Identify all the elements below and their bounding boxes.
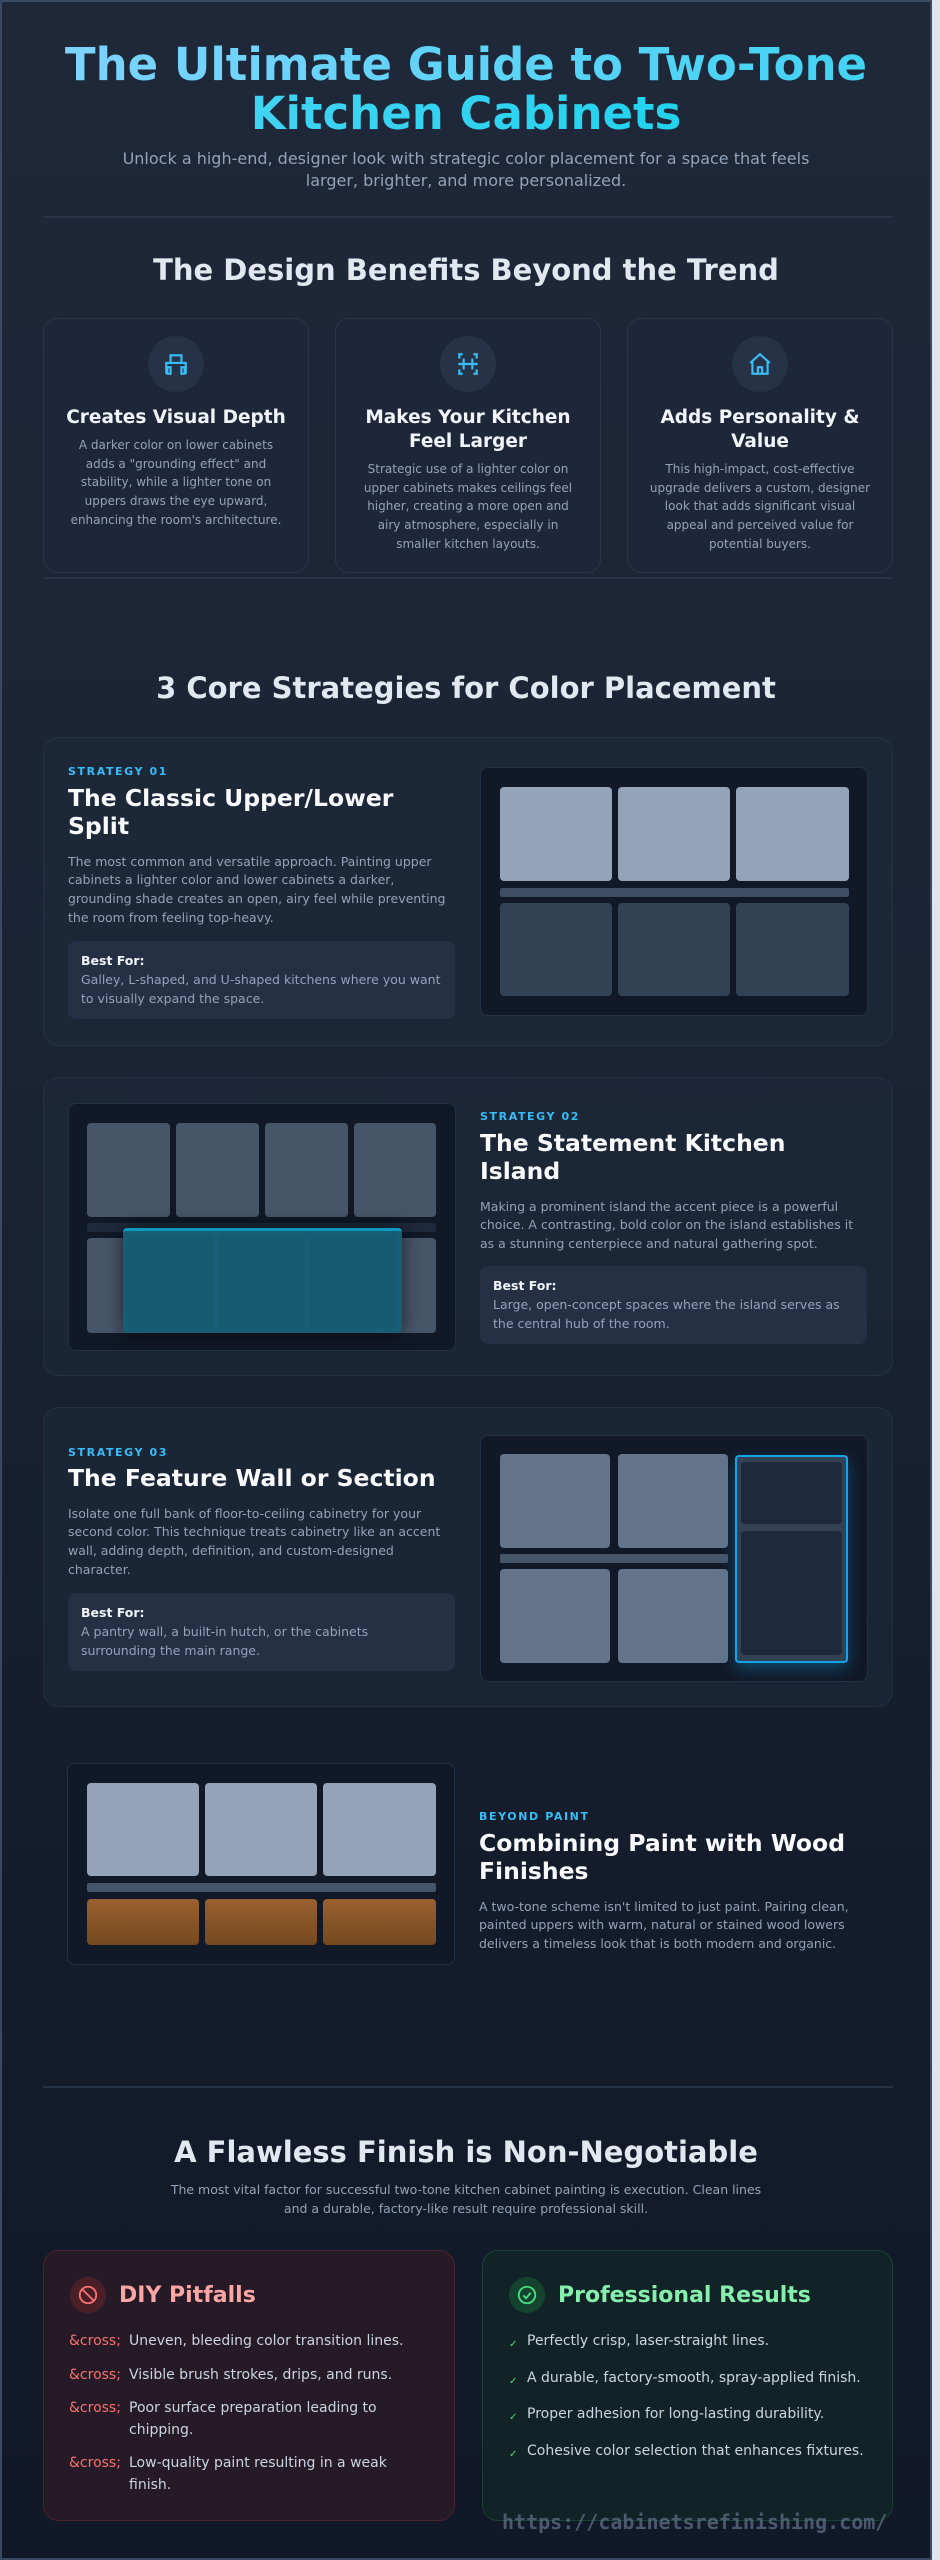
text: strategy 02: [480, 1110, 867, 1344]
text: strategy 03: Best For:: [81, 1605, 145, 1620]
card: visual depth: A darker color on lower cabinets adds a "grounding effect" and stability, while a lighter tone on uppers draws the eye upward, enhancing the room's architecture.: [71, 438, 281, 527]
text: strategy 02: Making a prominent island the accent piece is a powerful choice. A contrasting, bold color on the island establishes it as a stunning centerpiece and natural gathering spot.: [480, 1199, 853, 1251]
panel: DIY pitfalls: [43, 2250, 455, 2521]
heading: design benefits: The Design Benefits Beyond the Trend: [153, 253, 779, 287]
text: beyond paint: Finishes: [479, 1857, 589, 1885]
list: pitfalls: Poor surface preparation leading to chipping.: [129, 2400, 377, 2438]
title: The Ultimate Guide to Two-Tone: [65, 38, 867, 91]
text: strategy 02: Best For:: [493, 1278, 557, 1293]
text: strategy 03: [68, 1446, 455, 1671]
panel: strategy 01: [43, 737, 893, 1046]
text: strategy 02: Island: [480, 1157, 560, 1185]
text: strategy 03: A pantry wall, a built-in hutch, or the cabinets surrounding the main range.: [81, 1624, 368, 1658]
list: results: Cohesive color selection that enhances fixtures.: [527, 2442, 864, 2458]
list: pitfalls: Low-quality paint resulting in a weak finish.: [129, 2455, 387, 2492]
heading: flawless finish: A Flawless Finish is Non-Negotiable: [174, 2135, 758, 2169]
icon: depth: [148, 336, 204, 392]
card: feel larger: Makes Your Kitchen Feel Larger: [365, 407, 571, 452]
panel: strategy 03: [43, 1407, 893, 1707]
panel: professional results: [482, 2250, 893, 2521]
text: strategy 02: STRATEGY 02: [480, 1110, 580, 1123]
text: flawless subtitle: The most vital factor for successful two-tone kitchen cabinet painting is execution. Clean lines and a durable, factory-like result require professional skill.: [171, 2182, 761, 2216]
text: beyond paint: Combining Paint with Wood: [479, 1829, 845, 1857]
icon: expand: [440, 336, 496, 392]
card: personality: [627, 318, 893, 573]
list: results: Perfectly crisp, laser-straight lines.: [527, 2333, 769, 2349]
text: strategy 02: Large, open-concept spaces where the island serves as the central hub of the room.: [493, 1297, 840, 1331]
illustration: feature wall: [480, 1435, 868, 1682]
list: results: ✓: [509, 2376, 517, 2386]
list: pitfalls: &cross;: [69, 2400, 121, 2416]
card: feel larger: Strategic use of a lighter color on upper cabinets makes ceilings feel higher, creating a more open and airy atmosphere, especially in smaller kitchen layouts.: [364, 462, 572, 551]
text: strategy 03: Isolate one full bank of floor-to-ceiling cabinetry for your second color. This technique treats cabinetry like an accent wall, adding depth, definition, and custom-designed character.: [68, 1506, 440, 1577]
list: pitfalls: [69, 2333, 403, 2492]
list: results: ✓: [509, 2412, 517, 2423]
list: pitfalls: &cross;: [69, 2333, 121, 2349]
heading: professional: [509, 2277, 811, 2313]
heading: strategies: 3 Core Strategies for Color Placement: [156, 671, 776, 705]
text: beyond paint: BEYOND PAINT: [479, 1810, 590, 1823]
list: results: A durable, factory-smooth, spray-applied finish.: [527, 2370, 861, 2386]
heading: DIY: [70, 2277, 256, 2313]
text: strategy 01: Best For:: [81, 953, 145, 968]
icon: house: [732, 336, 788, 392]
text: strategy 01: The Classic Upper/Lower: [68, 784, 393, 812]
watermark url: https://cabinetsrefinishing.com/: [502, 2510, 887, 2534]
heading: DIY: DIY Pitfalls: [119, 2282, 256, 2308]
card: visual depth: Creates Visual Depth: [66, 407, 286, 428]
panel: strategy 02: [43, 1077, 893, 1376]
text: strategy 01: Galley, L-shaped, and U-shaped kitchens where you want to visually expand the space.: [81, 972, 440, 1006]
illustration: upper/lower split: [480, 767, 868, 1016]
list: results: Proper adhesion for long-lasting durability.: [527, 2406, 824, 2422]
list: pitfalls: Uneven, bleeding color transition lines.: [129, 2333, 403, 2349]
text: strategy 01: STRATEGY 01: [68, 765, 168, 778]
illustration: island: [68, 1103, 456, 1351]
card: personality: Adds Personality & Value: [660, 407, 860, 452]
text: strategy 01: [68, 765, 455, 1019]
panel: beyond paint: [67, 1763, 849, 1965]
list: results: ✓: [509, 2339, 517, 2350]
text: strategy 01: Split: [68, 812, 129, 840]
list: results: [509, 2333, 864, 2460]
subtitle: Unlock a high-end, designer look with strategic color placement for a space that feels larger, brighter, and more personalized.: [123, 149, 809, 190]
text: strategy 03: The Feature Wall or Section: [68, 1464, 436, 1492]
text: strategy 02: The Statement Kitchen: [480, 1129, 785, 1157]
list: results: ✓: [509, 2448, 517, 2460]
list: pitfalls: Visible brush strokes, drips, and runs.: [129, 2366, 392, 2382]
text: strategy 01: The most common and versatile approach. Painting upper cabinets a lighter color and lower cabinets a darker, grounding shade creates an open, airy feel while preventing the room from feeling top-heavy.: [68, 854, 445, 925]
text: beyond paint: A two-tone scheme isn't limited to just paint. Pairing clean, painted uppers with warm, natural or stained wood lowers delivers a timeless look that is both modern and organic.: [479, 1899, 849, 1951]
text: strategy 03: STRATEGY 03: [68, 1446, 168, 1459]
title: [65, 38, 867, 140]
title: Kitchen Cabinets: [251, 87, 681, 140]
card: visual depth: [43, 318, 309, 573]
heading: professional: Professional Results: [558, 2282, 811, 2308]
card: personality: This high-impact, cost-effective upgrade delivers a custom, designer look that adds significant visual appeal and perceived value for potential buyers.: [650, 462, 870, 551]
illustration: paint and wood: [67, 1763, 455, 1965]
text: beyond paint: [479, 1810, 849, 1951]
card: feel larger: [335, 318, 601, 573]
list: pitfalls: &cross;: [69, 2366, 121, 2382]
list: pitfalls: &cross;: [69, 2455, 121, 2471]
